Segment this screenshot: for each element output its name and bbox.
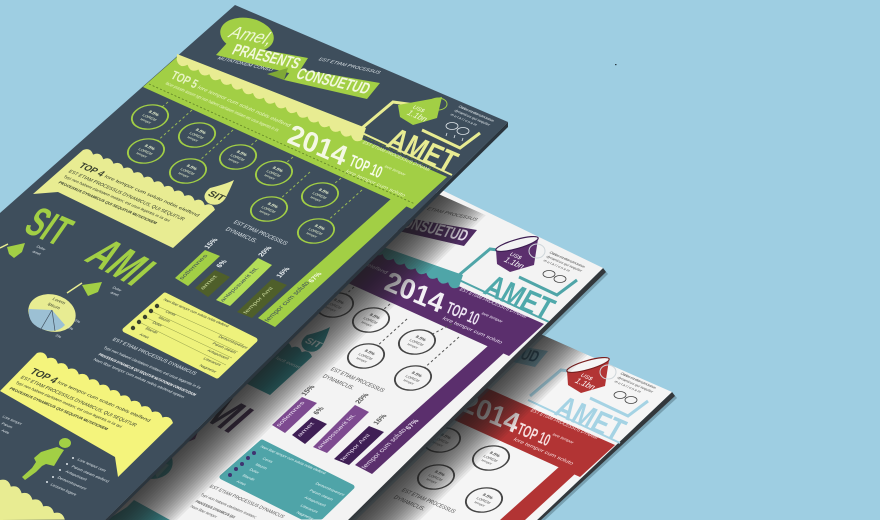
stat ring 4: LOREM (475, 496, 492, 505)
bar: sollemnes: sollemnes (275, 401, 307, 428)
pie chart (24, 289, 82, 339)
band lead text: lore tempor cum soluto nobis eleifend (196, 85, 292, 128)
stat ring 2: tempor (360, 321, 374, 328)
stat ring 5: 8.5% (410, 371, 424, 378)
drop icon with stem: Dolor (111, 286, 123, 293)
cloud icon (614, 392, 637, 404)
table panel: Nam liber tempor cum soluta nobis eleifend (259, 445, 327, 475)
speech bubble: top 4: PROCESSUS DYNAMICUS QUI SEQUITUR MUTATIONEM (57, 180, 159, 225)
bucket outline (530, 370, 583, 396)
stat ring 1: tempor (324, 306, 338, 313)
AMET wordmark: AMET (381, 121, 464, 179)
speech bubble: lower top 4: lore tempor cum soluto nobis eleifend (56, 380, 152, 423)
speech bubble: lower top 4 (0, 352, 173, 477)
speech bubble: top 4: lore tempor cum soluto nobis eleifend (103, 174, 201, 218)
table panel: Amet (235, 479, 248, 487)
pie chart: Ipsum (47, 302, 62, 310)
bar: tempor ami: tempor Ami (339, 434, 372, 462)
speech bubble (244, 342, 312, 395)
stat ring 4: LOREM (357, 352, 374, 361)
year 2014: 2014 (381, 266, 449, 319)
note text: mutationem (449, 113, 478, 127)
poster page edge shadow (537, 392, 677, 520)
ribbon: Praesents: PRAESENTS (229, 41, 304, 73)
stat ring 3: LOREM (427, 473, 444, 482)
drop badge SIT: SIT (205, 190, 227, 203)
person list: Parum claram eleifend (70, 464, 111, 483)
AMET wordmark: AMET (549, 389, 632, 447)
bottom bubble (0, 480, 65, 520)
column bar (258, 198, 408, 327)
bucket: 1.1bn (573, 377, 598, 391)
column bar (500, 466, 576, 520)
bar: amet: amet (296, 421, 317, 438)
stat ring 1: 8.5% (147, 110, 161, 117)
bucket: 1.1bn (502, 256, 527, 270)
bucket outline (362, 102, 415, 128)
stat ring 6: tempor (263, 174, 277, 181)
stat ring 2: 8.5% (488, 451, 502, 458)
stat ring 3 (411, 460, 461, 494)
stat ring 3: tempor (425, 478, 439, 485)
left caption text: Ante (0, 429, 10, 435)
table panel (125, 295, 255, 376)
year 2014: 2014 (458, 387, 524, 439)
band heading text: EST ETIAM PROCESSUS DYNAMI (529, 408, 599, 440)
bucket: US$ (508, 252, 523, 261)
drop icon with stem (67, 282, 123, 297)
band lead text: TOP 5 (168, 68, 201, 91)
stat ring 3 (121, 134, 171, 168)
stat ring 4: LOREM (229, 153, 246, 162)
stat ring 5: LOREM (404, 374, 421, 383)
speech bubble: lower top 4: Typi non habent claritatem insitam; est usus legentis in iis qui (14, 380, 124, 429)
stat ring 3: LOREM (408, 338, 425, 347)
top ribbon fragment: CONSUETUD (462, 333, 543, 366)
speech bubble: lower top 4: PROCESSUS DYNAMICUS QUI SEQUITUR MUTATIONEM (8, 386, 110, 431)
stat ring 1: 8.5% (439, 433, 453, 440)
AMET wordmark: AMET (478, 268, 561, 326)
stat ring 5: tempor (177, 172, 191, 179)
stat ring 2: LOREM (188, 131, 205, 140)
speech bubble: lower top 4: EST ETIAM PROCESSUS DYNAMICUS, QUI SEQUITUR (19, 375, 138, 428)
title blob (217, 14, 279, 56)
speech bubble: top 4 (33, 149, 215, 248)
stat ring 1 (417, 423, 467, 457)
bar: sollemnes: 15% (300, 385, 317, 397)
stat ring 6: 8.5% (271, 166, 285, 173)
column bar: tempor cum soluto (263, 281, 312, 323)
bucket: US$ (579, 373, 594, 382)
note text: mutationem (613, 380, 642, 394)
bar: anteposuerit: anteposuerit litt. (316, 413, 358, 450)
title blob: Amel, (224, 23, 279, 49)
stat ring 7: 8.5% (317, 188, 331, 195)
bar: anteposuerit: 20% (354, 393, 371, 405)
top ribbon fragment (452, 333, 548, 367)
note text (613, 372, 657, 394)
stat ring 3: LOREM (137, 147, 154, 156)
stat ring 3 (398, 329, 436, 355)
stat ring 4: 8.5% (363, 349, 377, 356)
stat ring 5: tempor (402, 379, 416, 386)
cloud icon (446, 122, 469, 141)
AMET wordmark (460, 276, 578, 322)
paragraph block: PROCESSUS DYNAMICUS QUI SEQUITUR MUTATIONEM CONSUETUDIUM (97, 352, 198, 397)
bar: anteposuerit: 20% (257, 246, 274, 258)
stat ring 7 (295, 178, 345, 212)
column bar (355, 345, 505, 474)
stat ring 1 (125, 100, 175, 134)
note text: dynamicus qui sequitur (545, 255, 584, 273)
stat ring 2: 8.5% (194, 128, 208, 135)
table panel: Demonstraverunt (314, 481, 347, 497)
stat ring 6: LOREM (265, 169, 282, 178)
band lead text: lore tempor cum soluto nobis eleifend (293, 232, 389, 275)
stat ring 2: tempor (186, 136, 200, 143)
poster side edge (537, 392, 675, 520)
table panel: Dolor (248, 467, 261, 475)
person list: Demonstraverunt (56, 475, 89, 491)
bars chart heading (224, 220, 289, 247)
stat ring 2: LOREM (482, 454, 499, 463)
band scallop (177, 54, 366, 141)
dynamicus heading: DYNAMICUS. (392, 495, 427, 512)
pie chart: 5% (54, 334, 63, 339)
bar: sollemnes (272, 385, 317, 433)
bar: amet: amet (199, 274, 220, 291)
stat ring 4: tempor (355, 357, 369, 364)
band heading text: lore tempor cum soluto (512, 437, 575, 466)
ribbon fold (267, 68, 288, 80)
bar: tempor ami: tempor Ami (242, 287, 275, 315)
pie chart: 5% (66, 326, 75, 331)
header captions: EST ETIAM PROCESSUS (317, 57, 382, 75)
poster: red version (back) (311, 290, 677, 520)
dashed connectors (346, 286, 460, 368)
stat ring 9: tempor (305, 232, 319, 239)
bar: anteposuerit (216, 246, 274, 306)
small drop with caption (0, 243, 47, 258)
band heading text: lore tempor (480, 311, 505, 324)
stat ring 5: LOREM (179, 167, 196, 176)
stat ring 8: tempor (258, 210, 272, 217)
chart heading: EST ETIAM PROCESSUS (329, 367, 386, 394)
left caption text: Lore tempor (1, 415, 24, 426)
small drop with caption: amet (31, 250, 43, 256)
stat ring 1: LOREM (141, 113, 158, 122)
note text: Claritas est etiam processus (619, 372, 657, 390)
chart heading (322, 367, 385, 392)
bar: tempor ami: 16% (275, 267, 292, 279)
chart heading: DYNAMICUS. (321, 374, 356, 391)
poster: purple version (middle) (105, 189, 608, 520)
stat ring 9 (291, 214, 341, 248)
big word SIT: SIT (16, 199, 81, 255)
band lead text (164, 68, 292, 133)
table panel: Parum claram (308, 488, 335, 502)
poster page edge shadow (348, 268, 608, 520)
stat ring 4: 8.5% (235, 150, 249, 157)
poster side edge (348, 268, 606, 520)
poster page (80, 160, 603, 520)
bar: tempor ami: 16% (372, 414, 389, 426)
bucket: US$ (411, 105, 426, 114)
stat ring 8: 8.5% (266, 202, 280, 209)
table panel: Dolor (151, 320, 164, 328)
table panel: Blandit (144, 326, 160, 335)
stat ring 1: tempor (431, 441, 445, 448)
stat ring 7: tempor (309, 196, 323, 203)
stat ring 3: 8.5% (433, 470, 447, 477)
stat ring 3: 8.5% (414, 335, 428, 342)
stat ring 2: LOREM (362, 316, 379, 325)
bars chart heading: EST ETIAM PROCESSUS (232, 220, 289, 247)
person list: Lectores legere (49, 482, 79, 497)
stat ring 4: tempor (473, 501, 487, 508)
person list: Anteposuerit (64, 469, 89, 482)
band heading text: lore tempor cum soluto (344, 169, 407, 198)
note text: mutationem (542, 259, 571, 273)
header captions: MUTATIONEM CONSU (216, 56, 274, 73)
header captions (216, 56, 382, 75)
stat ring 1: LOREM (433, 436, 450, 445)
bar: tempor ami (237, 267, 292, 318)
cloud icon (543, 270, 566, 282)
stat ring 2 (352, 307, 390, 333)
bar: sollemnes: 15% (203, 238, 220, 250)
poster side edge (105, 122, 508, 520)
band heading text: TOP 10 (346, 151, 385, 182)
stat ring 5 (394, 365, 432, 391)
ribbon: Praesents (216, 41, 308, 75)
bar: amet: 6% (312, 406, 326, 416)
stat ring 9: 8.5% (313, 224, 327, 231)
band: year (311, 325, 615, 477)
table panel: Litterarum (202, 356, 223, 367)
shadow cast by green poster (105, 193, 486, 520)
band lead text: facer possim assum typi non habent claritatem insitam est usus legentis in iis (164, 81, 280, 133)
band (346, 246, 544, 356)
stat ring 9: LOREM (307, 227, 324, 236)
note text: Claritas est etiam processus (457, 105, 495, 123)
paragraph block: Nam liber tempor (189, 504, 219, 519)
stat ring 2: tempor (480, 459, 494, 466)
stat ring 2 (466, 441, 516, 475)
poster: green version (front) (0, 5, 508, 520)
stat ring 1 (317, 292, 354, 318)
table panel: Amet (138, 332, 151, 340)
table panel: Nam liber tempor cum soluta nobis eleifend (162, 298, 230, 328)
speech bubble: lower top 4: TOP 4 (27, 367, 61, 386)
bar: anteposuerit: anteposuerit litt. (219, 266, 261, 303)
ribbon: Consuetud (284, 65, 380, 99)
green band (143, 57, 447, 209)
lower bubble (107, 500, 170, 520)
bar: sollemnes: sollemnes (178, 254, 210, 281)
table panel: Anteposuerit (206, 348, 231, 361)
dashed connectors (146, 102, 362, 231)
top ribbon: CONSUETUD (391, 212, 472, 245)
table panel (222, 442, 352, 520)
drop icon with stem: amet (109, 291, 121, 297)
band heading text (344, 140, 431, 198)
speech bubble: top 4: Typi non habent claritatem insitam; est usus legentis in iis qui (62, 174, 172, 223)
stat ring 4: 8.5% (481, 493, 495, 500)
band heading text: EST ETIAM PROCESSUS DYNAMI (458, 287, 528, 319)
bar: amet: 6% (215, 259, 229, 269)
table panel: Litterarum (299, 503, 320, 514)
band heading text (441, 287, 528, 345)
big word AMI: AMI (75, 230, 167, 294)
band heading text: EST ETIAM PROCESSUS DYNAMI (361, 140, 431, 172)
speech bubble: top 4: TOP 4 (76, 162, 107, 179)
table panel: Parum claram (211, 341, 238, 355)
stat ring 4: tempor (227, 158, 241, 165)
speech bubble: est usus legentis in iis qui facit eorum (216, 331, 303, 370)
table panel: Cenis (261, 456, 274, 464)
pie chart: Lorem (51, 297, 67, 305)
stat ring 1: tempor (139, 118, 153, 125)
year 2014: 2014 (284, 119, 352, 172)
paragraph block: EST ETIAM PROCESSUS DYNAMICUS (111, 337, 198, 377)
table panel: Mazim (157, 315, 172, 324)
drop icon (184, 430, 198, 442)
table panel: Blandit (241, 473, 257, 482)
speech bubble: top 4: EST ETIAM PROCESSUS DYNAMICUS, QUI SEQUITUR (67, 169, 186, 222)
stat ring 2: 8.5% (368, 313, 382, 320)
paragraph block (92, 337, 202, 399)
column bar: tempor cum soluto (360, 428, 409, 470)
paragraph block: Typi non habent claritatem insitam; est usus legentis in iis (102, 345, 202, 390)
table panel: Anteposuerit (303, 495, 328, 508)
paragraph block: Nam liber tempor cum soluta nobis eleifend option (92, 357, 187, 399)
pie chart (147, 455, 173, 479)
band heading text: TOP 10 (514, 419, 553, 450)
small speck (615, 64, 616, 65)
poster page (340, 290, 672, 520)
big word AMI: AMI (172, 377, 264, 441)
bar: anteposuerit (313, 393, 371, 453)
person list (46, 457, 111, 497)
drop badge SIT (301, 327, 330, 352)
band heading text: TOP 10 (443, 298, 482, 329)
icon: person (22, 438, 71, 480)
table panel: Cenis (164, 309, 177, 317)
left caption text (0, 415, 24, 435)
bar: amet (292, 406, 327, 444)
ribbon caption: EST ETIAM PROCESSUS (414, 204, 479, 222)
stat ring 4 (213, 140, 263, 174)
dynamicus heading (392, 488, 457, 515)
pie chart: 5% (73, 319, 82, 324)
band heading text: lore tempor (383, 164, 408, 177)
note text: Claritas est etiam processus (548, 251, 586, 269)
ribbon: Consuetud: CONSUETUD (293, 65, 374, 98)
stat ring 3: tempor (406, 343, 420, 350)
shadow cast by purple poster (348, 333, 588, 520)
top ribbon (398, 219, 477, 246)
poster page (0, 5, 508, 520)
bars chart heading: DYNAMICUS. (224, 227, 259, 244)
bar: amet (195, 259, 230, 297)
band heading text (512, 408, 599, 466)
table panel: Demonstraverunt (217, 334, 250, 350)
band heading text: lore tempor (551, 432, 576, 445)
stat ring 5 (163, 154, 213, 188)
stat ring 3: 8.5% (143, 144, 157, 151)
stat ring 8: LOREM (260, 205, 277, 214)
stat ring 3: tempor (135, 152, 149, 159)
table panel: Mazim (254, 462, 269, 471)
stat ring 1: 8.5% (332, 298, 346, 305)
note text (449, 105, 495, 127)
drop badge SIT: SIT (302, 337, 324, 350)
bar: tempor ami (334, 414, 389, 465)
stat ring 2 (172, 118, 222, 152)
stat ring 1: LOREM (326, 301, 343, 310)
note text: dynamicus qui sequitur (453, 109, 492, 127)
stat ring 6 (249, 156, 299, 190)
person list: Lore tempor cum (76, 457, 108, 473)
note text: dynamicus qui sequitur (616, 376, 655, 394)
bucket: 1.1bn (405, 109, 430, 123)
stat ring 5: 8.5% (185, 164, 199, 171)
column bar: 67% (404, 419, 421, 431)
band heading text: lore tempor cum soluto (441, 316, 504, 345)
bucket (398, 97, 447, 125)
left caption text: Parum (0, 422, 13, 429)
stat ring 4 (459, 483, 509, 517)
bucket (566, 355, 616, 393)
column bar: 67% (307, 272, 324, 284)
stat ring 7: LOREM (311, 191, 328, 200)
table panel: Nagmetur (198, 363, 219, 374)
paragraph block (189, 484, 286, 520)
small drop with caption: Dolor (35, 245, 47, 252)
band scallop (378, 246, 463, 288)
stat ring 4 (346, 343, 386, 369)
stat ring 8 (244, 192, 294, 226)
drop badge SIT (204, 180, 234, 205)
bar: sollemnes (175, 238, 220, 286)
bucket (495, 234, 545, 272)
bucket outline (458, 247, 496, 274)
